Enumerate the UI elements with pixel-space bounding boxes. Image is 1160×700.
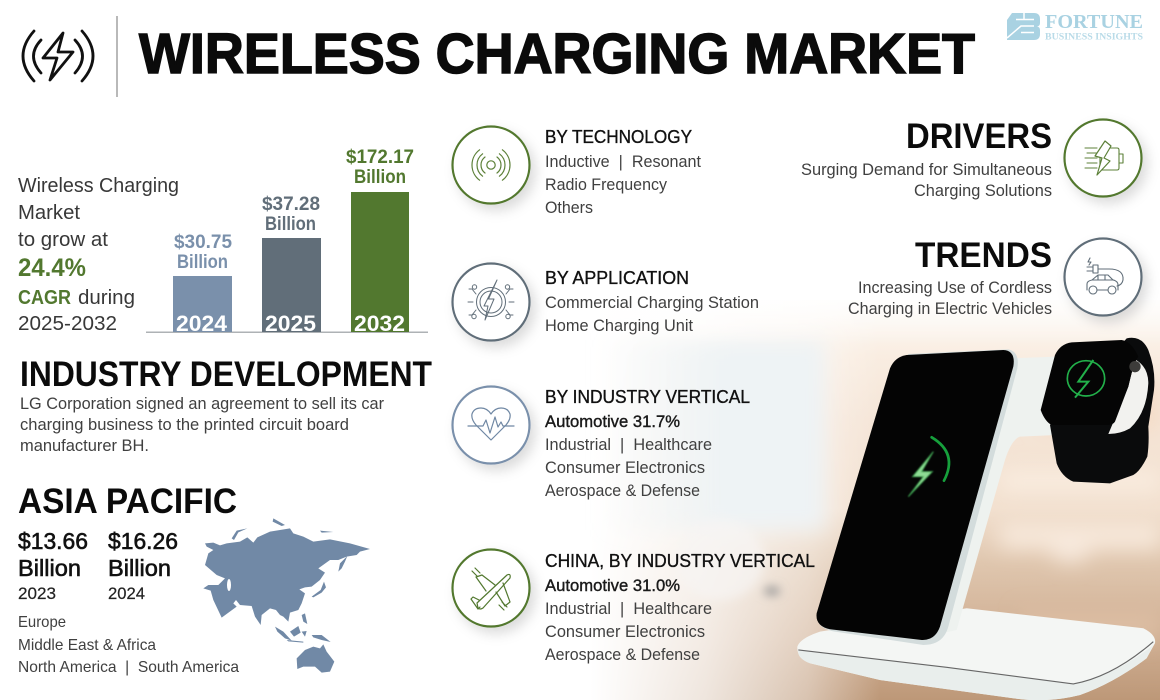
value 2024: $16.26 bbox=[108, 528, 178, 554]
text block: CAGR statement: Wireless Charging bbox=[18, 174, 179, 197]
bar 2024: 2024 bbox=[176, 311, 228, 336]
map: Asia Pacific bbox=[203, 518, 370, 673]
body text bbox=[20, 395, 384, 455]
bar 2024: $30.75 bbox=[174, 232, 232, 253]
value 2023: 2023 bbox=[18, 585, 56, 603]
heading: DRIVERS bbox=[906, 117, 1052, 156]
text block: CAGR statement: CAGR bbox=[18, 287, 71, 309]
other regions list bbox=[18, 614, 239, 676]
heading: CHINA, BY INDUSTRY VERTICAL bbox=[545, 550, 815, 571]
icon: wireless charging bolt bbox=[23, 31, 93, 81]
bar 2024: Billion bbox=[177, 252, 228, 273]
logo mark bbox=[1007, 13, 1040, 40]
bar 2032: Billion bbox=[354, 167, 406, 188]
heading: INDUSTRY DEVELOPMENT bbox=[20, 355, 432, 394]
body text: Increasing Use of Cordless bbox=[858, 279, 1052, 297]
value 2024: 2024 bbox=[108, 585, 145, 603]
other regions list: Europe bbox=[18, 614, 66, 631]
phone bbox=[816, 349, 1018, 645]
body text bbox=[801, 161, 1052, 200]
items: Aerospace & Defense bbox=[545, 646, 700, 664]
icon: airplane bbox=[452, 550, 530, 626]
phone charge arc bbox=[932, 437, 949, 481]
watch band bbox=[1050, 338, 1154, 483]
logo name: FORTUNE bbox=[1045, 11, 1143, 33]
watch charge symbol bbox=[1067, 360, 1105, 398]
items bbox=[545, 294, 759, 335]
value 2024 bbox=[108, 528, 178, 603]
segment: by industry vertical bbox=[452, 386, 750, 500]
body text bbox=[848, 279, 1052, 318]
icon: fast charging battery bbox=[1064, 120, 1142, 196]
charging base bbox=[797, 608, 1155, 700]
product photo: wireless charging stand bbox=[797, 349, 1155, 700]
heading: BY APPLICATION bbox=[545, 267, 689, 288]
watch bbox=[1041, 338, 1154, 483]
body text: Charging in Electric Vehicles bbox=[848, 300, 1052, 318]
bar 2025: $37.28 bbox=[262, 194, 320, 215]
body text: Surging Demand for Simultaneous bbox=[801, 161, 1052, 179]
text block: CAGR statement: during bbox=[78, 286, 135, 309]
title: WIRELESS CHARGING MARKET bbox=[139, 22, 975, 86]
heading: TRENDS bbox=[915, 236, 1052, 275]
logo: Fortune Business Insights bbox=[1007, 11, 1143, 42]
charging puck bbox=[1108, 359, 1148, 434]
value 2023 bbox=[18, 528, 88, 603]
items: Radio Frequency bbox=[545, 176, 668, 194]
leading share: Automotive 31.7% bbox=[545, 413, 680, 431]
other regions list: North America | South America bbox=[18, 659, 239, 676]
body text: manufacturer BH. bbox=[20, 437, 149, 455]
bar 2032: $172.17 bbox=[346, 147, 414, 168]
logo tagline: BUSINESS INSIGHTS bbox=[1045, 32, 1143, 42]
panel: Asia Pacific bbox=[18, 482, 370, 676]
items bbox=[545, 600, 712, 664]
bar chart: market size bbox=[146, 147, 428, 336]
bar 2032: 2032 bbox=[354, 311, 405, 336]
value 2023: $13.66 bbox=[18, 528, 88, 554]
text block: CAGR statement: to grow at bbox=[18, 228, 108, 251]
items: Home Charging Unit bbox=[545, 317, 693, 335]
value 2023: Billion bbox=[18, 555, 81, 581]
panel: trends bbox=[848, 236, 1142, 318]
segment: by technology bbox=[452, 126, 701, 217]
segment: by application bbox=[452, 264, 759, 340]
text block: CAGR statement: 24.4% bbox=[18, 254, 86, 282]
heading: ASIA PACIFIC bbox=[18, 482, 237, 521]
stand arm bbox=[927, 357, 1057, 637]
panel: industry development bbox=[20, 355, 432, 455]
text block: CAGR statement: Market bbox=[18, 201, 80, 224]
bar 2032 bbox=[346, 147, 414, 336]
icon: charging circuit bbox=[452, 264, 530, 340]
segment: China by industry vertical bbox=[452, 550, 815, 664]
text block: CAGR statement: 2025-2032 bbox=[18, 312, 117, 335]
phone charge bolt bbox=[908, 452, 933, 497]
leading share: Automotive 31.0% bbox=[545, 577, 680, 595]
items: Industrial | Healthcare bbox=[545, 600, 712, 618]
panel: drivers bbox=[801, 117, 1142, 200]
bar 2025: 2025 bbox=[265, 311, 316, 336]
icon: heart pulse bbox=[452, 386, 530, 464]
text block: CAGR statement bbox=[18, 174, 179, 335]
heading: BY INDUSTRY VERTICAL bbox=[545, 386, 750, 407]
body text: Charging Solutions bbox=[914, 182, 1052, 200]
items: Consumer Electronics bbox=[545, 459, 705, 477]
background photo: blurred desk scene bbox=[590, 250, 1160, 700]
heading: BY TECHNOLOGY bbox=[545, 126, 692, 147]
items: Consumer Electronics bbox=[545, 623, 705, 641]
items: Others bbox=[545, 199, 593, 217]
items bbox=[545, 153, 701, 217]
title divider bbox=[116, 16, 118, 97]
items: Commercial Charging Station bbox=[545, 294, 759, 312]
items bbox=[545, 436, 712, 500]
bar 2025 bbox=[262, 194, 321, 336]
bar 2025: Billion bbox=[265, 214, 316, 235]
items: Aerospace & Defense bbox=[545, 482, 700, 500]
items: Inductive | Resonant bbox=[545, 153, 701, 171]
icon: wireless signal bbox=[452, 126, 530, 204]
items: Industrial | Healthcare bbox=[545, 436, 712, 454]
body text: LG Corporation signed an agreement to sell its car bbox=[20, 395, 384, 413]
value 2024: Billion bbox=[108, 555, 171, 581]
bar 2024 bbox=[173, 232, 232, 336]
watch face bbox=[1041, 340, 1138, 425]
body text: charging business to the printed circuit board bbox=[20, 416, 349, 434]
icon: electric car plug bbox=[1064, 238, 1142, 316]
blurred mug on the desk bbox=[676, 520, 780, 600]
other regions list: Middle East & Africa bbox=[18, 637, 156, 654]
